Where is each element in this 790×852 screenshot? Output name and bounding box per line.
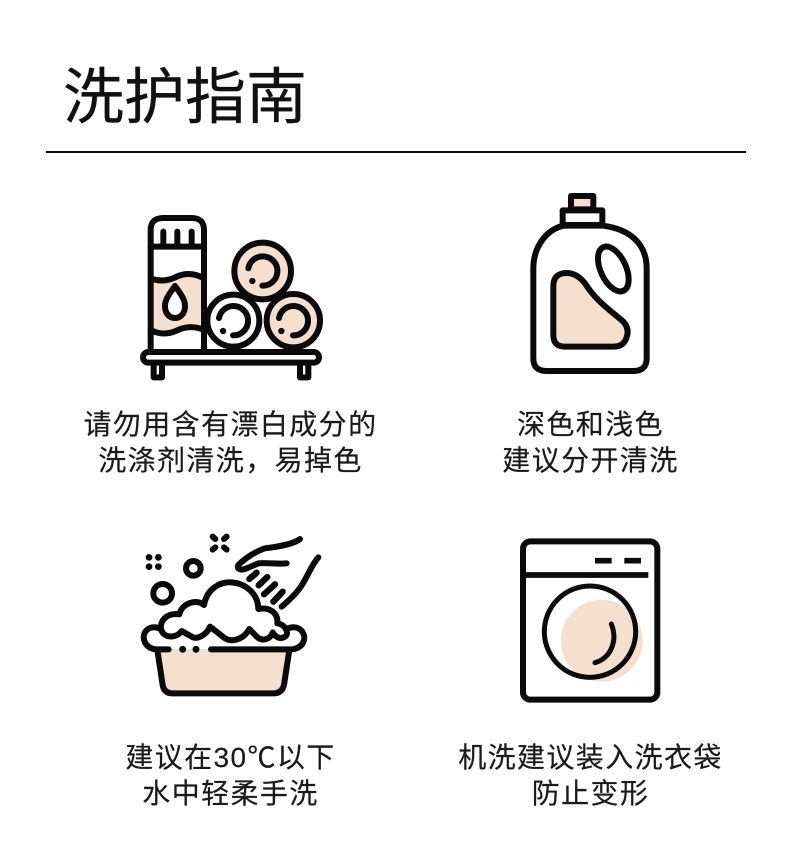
caption: separate colours: 建议分开清洗: [502, 445, 679, 476]
caption: separate colours: 深色和浅色: [517, 409, 664, 440]
icon: detergent can and towels on shelf: [143, 218, 320, 377]
caption: hand wash temperature: 水中轻柔手洗: [142, 778, 319, 809]
caption: machine wash bag: [458, 742, 723, 809]
caption: bleach warning: 洗涤剂清洗，易掉色: [98, 445, 363, 476]
caption: machine wash bag: 防止变形: [532, 778, 649, 809]
title: 洗护指南: [63, 63, 307, 131]
caption: hand wash temperature: 建议在30℃以下: [125, 742, 336, 773]
caption: bleach warning: [83, 409, 378, 476]
icon: washing machine: [523, 541, 657, 700]
icon: hand washing basin: [144, 537, 318, 693]
icon: detergent bottle: [533, 196, 647, 371]
caption: bleach warning: 请勿用含有漂白成分的: [83, 409, 378, 440]
caption: hand wash temperature: [125, 742, 336, 809]
caption: separate colours: [502, 409, 679, 476]
caption: machine wash bag: 机洗建议装入洗衣袋: [458, 742, 723, 773]
